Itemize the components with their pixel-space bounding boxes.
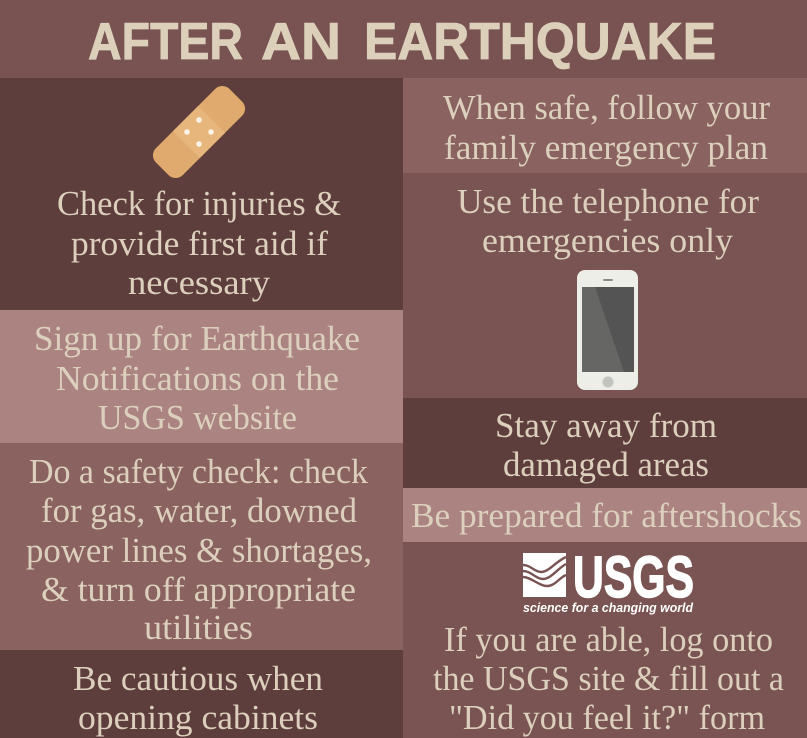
header band bbox=[0, 0, 807, 78]
panel: cabinets bbox=[0, 650, 403, 738]
panel: aftershocks: Be prepared for aftershocks bbox=[411, 496, 802, 535]
title: EARTHQUAKE bbox=[364, 13, 716, 71]
panel: telephone bbox=[403, 173, 807, 398]
icon: bandage bbox=[149, 82, 249, 182]
logo: USGS: USGS bbox=[573, 545, 694, 610]
panel: cabinets: Be cautious when bbox=[73, 659, 323, 698]
panel: damaged areas bbox=[403, 398, 807, 488]
logo: USGS bbox=[523, 545, 694, 615]
panel: telephone: Use the telephone for bbox=[457, 182, 759, 221]
panel: did you feel it: If you are able, log onto bbox=[444, 620, 773, 659]
panel: did you feel it: "Did you feel it?" form bbox=[449, 698, 765, 737]
panel: safety check: power lines & shortages, bbox=[26, 531, 372, 570]
panel: did you feel it bbox=[403, 542, 807, 738]
panel: earthquake notifications: Notifications on the bbox=[56, 359, 339, 398]
panel: damaged areas: damaged areas bbox=[503, 445, 709, 484]
logo: USGS: science for a changing world bbox=[523, 601, 693, 615]
panel: check for injuries bbox=[0, 78, 403, 310]
panel: damaged areas: Stay away from bbox=[495, 406, 717, 445]
panel: did you feel it: the USGS site & fill out a bbox=[433, 659, 784, 698]
panel: safety check: Do a safety check: check bbox=[29, 452, 368, 491]
icon: smartphone bbox=[577, 270, 638, 390]
panel: earthquake notifications: USGS website bbox=[98, 398, 297, 437]
panel: aftershocks bbox=[403, 488, 807, 542]
text: check for injuries bbox=[57, 184, 341, 302]
panel: family emergency plan: family emergency plan bbox=[444, 128, 768, 167]
title: AFTER bbox=[88, 13, 243, 71]
text: check for injuries: necessary bbox=[128, 263, 271, 302]
title: AN bbox=[261, 13, 341, 71]
panel: family emergency plan: When safe, follow your bbox=[443, 88, 770, 127]
panel: cabinets: opening cabinets bbox=[78, 698, 318, 737]
panel: safety check: utilities bbox=[144, 608, 253, 647]
title bbox=[88, 13, 716, 71]
panel: safety check bbox=[0, 443, 403, 650]
panel: safety check: & turn off appropriate bbox=[41, 570, 356, 609]
text: check for injuries: provide first aid if bbox=[71, 224, 328, 263]
panel: earthquake notifications bbox=[0, 310, 403, 443]
panel: telephone: emergencies only bbox=[482, 221, 734, 260]
text: check for injuries: Check for injuries & bbox=[57, 184, 341, 223]
panel: safety check: for gas, water, downed bbox=[41, 491, 357, 530]
panel: earthquake notifications: Sign up for Earthquake bbox=[34, 319, 360, 358]
panel: family emergency plan bbox=[403, 78, 807, 173]
